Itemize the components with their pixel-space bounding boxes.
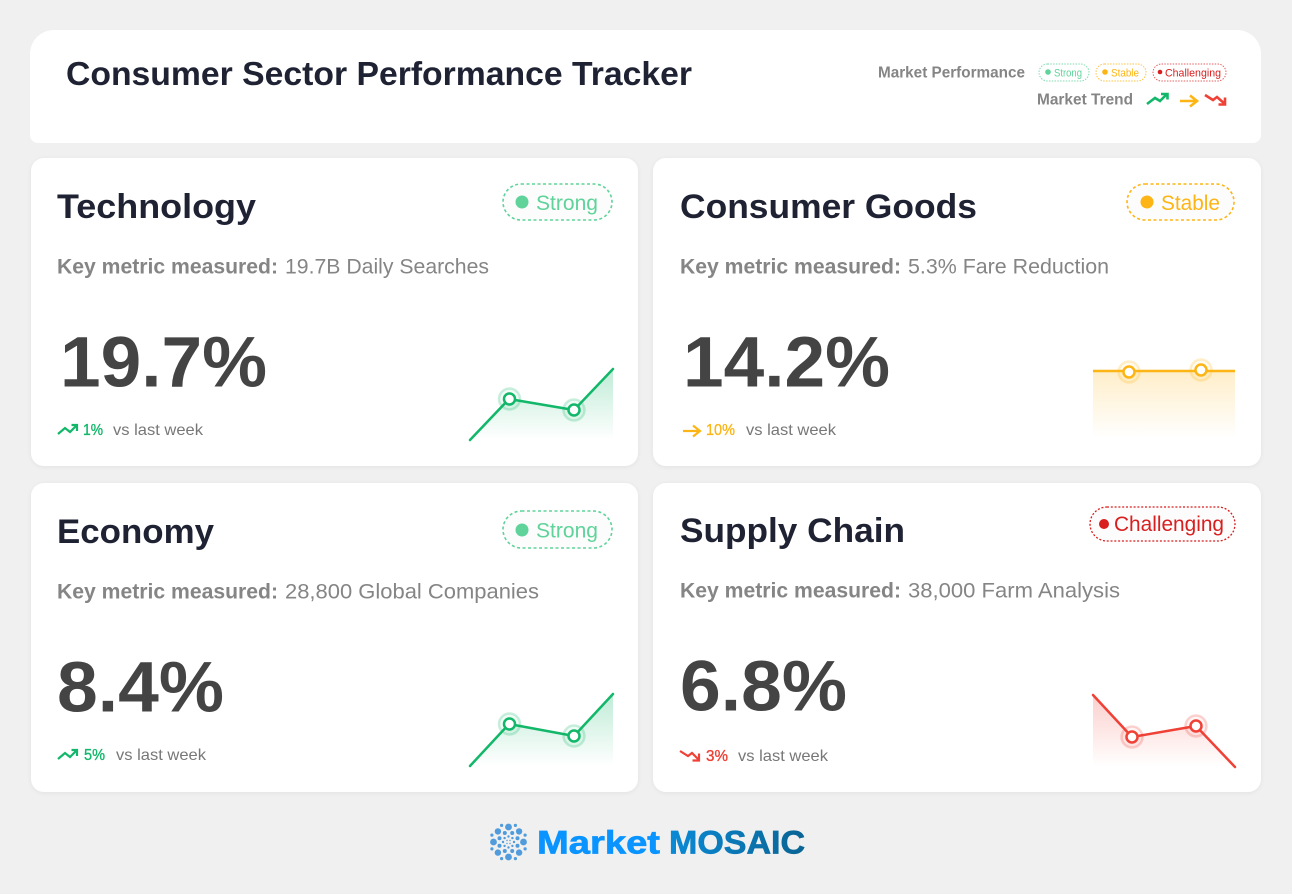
wordmark: MOSAIC <box>669 824 805 860</box>
status badge <box>503 511 612 548</box>
legend: market performance: Challenging <box>1165 68 1221 80</box>
weekly change <box>58 422 204 439</box>
sparkline <box>470 369 613 440</box>
key metric: Key metric measured: <box>680 580 901 602</box>
sparkline <box>1093 695 1235 767</box>
key metric <box>57 256 489 278</box>
key metric <box>57 580 539 604</box>
weekly change: 10% <box>706 422 735 439</box>
key metric <box>680 256 1109 278</box>
legend: market trend <box>1037 92 1225 108</box>
weekly change: vs last week <box>746 422 837 439</box>
weekly change: vs last week <box>116 747 207 764</box>
key metric: Key metric measured: <box>57 580 278 604</box>
icon: mosaic dots <box>490 824 527 860</box>
heading: Supply Chain <box>680 512 905 550</box>
big number: 14.2% <box>683 324 890 402</box>
status badge: Challenging <box>1114 512 1224 536</box>
key metric: Key metric measured: <box>57 256 278 278</box>
legend: market performance <box>878 64 1226 82</box>
sparkline <box>1093 360 1235 438</box>
key metric: Key metric measured: <box>680 256 901 278</box>
panel: consumer goods <box>653 158 1261 466</box>
panel: economy <box>31 483 638 792</box>
logo: market mosaic <box>490 824 805 860</box>
big number: 6.8% <box>680 648 847 726</box>
wordmark: Market <box>537 824 660 860</box>
header panel <box>30 30 1261 143</box>
heading: Economy <box>57 513 214 551</box>
status badge <box>1127 184 1234 220</box>
weekly change: vs last week <box>113 422 204 439</box>
title: Consumer Sector Performance Tracker <box>66 56 692 93</box>
key metric: 28,800 Global Companies <box>285 580 539 604</box>
legend: market performance: Market Performance <box>878 64 1025 82</box>
big number: 8.4% <box>57 648 224 728</box>
weekly change: vs last week <box>738 748 829 765</box>
status badge <box>503 184 612 220</box>
weekly change: 3% <box>706 748 728 765</box>
big number: 19.7% <box>60 324 267 402</box>
panel: technology <box>31 158 638 466</box>
legend: market trend: Market Trend <box>1037 92 1133 108</box>
legend: market performance: Stable <box>1111 68 1139 80</box>
key metric: 5.3% Fare Reduction <box>908 256 1109 278</box>
key metric <box>680 580 1120 602</box>
weekly change <box>58 747 207 764</box>
weekly change <box>680 748 829 765</box>
key metric: 19.7B Daily Searches <box>285 256 489 278</box>
weekly change: 5% <box>84 747 105 764</box>
wordmark <box>537 824 805 860</box>
sparkline <box>470 694 613 766</box>
status badge: Strong <box>536 191 598 215</box>
key metric: 38,000 Farm Analysis <box>908 580 1120 602</box>
status badge: Stable <box>1161 191 1220 215</box>
heading: Technology <box>57 188 256 226</box>
heading: Consumer Goods <box>680 188 977 226</box>
panel: supply chain <box>653 483 1261 792</box>
status badge: Strong <box>536 518 598 542</box>
status badge <box>1090 507 1235 541</box>
weekly change <box>683 422 837 439</box>
weekly change: 1% <box>83 422 103 439</box>
legend: market performance: Strong <box>1054 68 1082 80</box>
